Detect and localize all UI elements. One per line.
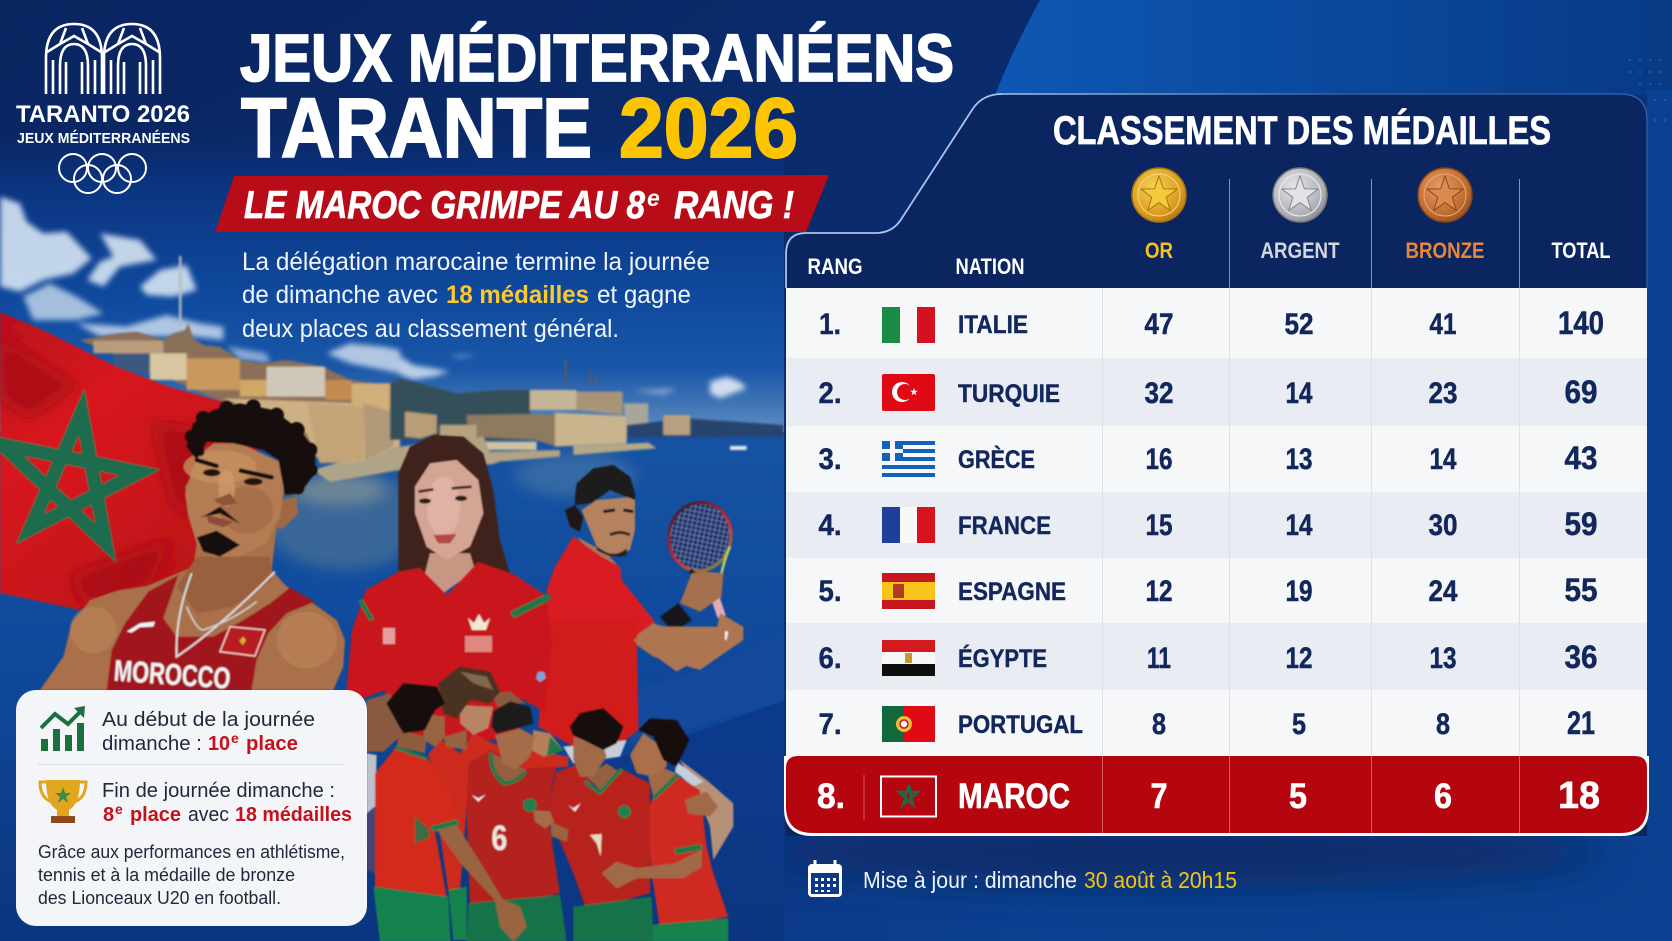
ear xyxy=(275,497,298,528)
row: Portugal: 21 xyxy=(1567,705,1595,741)
icon: olympic rings xyxy=(59,154,146,193)
title xyxy=(240,21,954,175)
row: Turquie: 69 xyxy=(1564,374,1598,410)
red banner xyxy=(215,175,829,232)
row: Égypte xyxy=(818,639,1598,676)
row: Turquie: 14 xyxy=(1286,377,1313,410)
row: Italie: 41 xyxy=(1430,308,1456,341)
lower blue swoosh xyxy=(630,630,786,745)
row: France: 59 xyxy=(1564,506,1598,542)
text: start of day: e xyxy=(231,730,239,746)
flag: Egypt xyxy=(882,640,935,676)
info card xyxy=(16,690,367,926)
column headers: NATION xyxy=(956,254,1024,279)
text: explanation xyxy=(38,842,345,908)
flag: Morocco xyxy=(881,776,936,816)
logo subtitle: JEUX MÉDITERRANÉENS xyxy=(17,130,190,147)
row: Grèce: GRÈCE xyxy=(958,445,1035,474)
icon: trophy xyxy=(40,780,86,823)
flag star xyxy=(2,412,140,543)
athlete: runner xyxy=(40,399,345,696)
red banner: LE MAROC GRIMPE AU 8 xyxy=(244,184,645,227)
icon: calendar xyxy=(808,860,842,897)
row: Turquie: 32 xyxy=(1144,377,1174,410)
row: Maroc highlighted: 6 xyxy=(1434,777,1452,816)
row: France: 15 xyxy=(1146,509,1172,542)
player 3: 6 xyxy=(491,819,507,858)
row: Égypte: 11 xyxy=(1147,642,1171,675)
flag: Spain xyxy=(882,573,935,609)
text: start of day: place xyxy=(246,733,298,755)
singlet xyxy=(107,575,315,690)
row: Égypte: 13 xyxy=(1430,642,1456,675)
small flag on chest xyxy=(220,627,265,656)
cap xyxy=(575,465,635,505)
logo wordmark: TARANTO 2026 xyxy=(16,101,190,128)
decorative dots xyxy=(1629,59,1666,121)
row: France: 30 xyxy=(1428,509,1458,542)
text: end of day: place xyxy=(130,804,181,826)
row: Maroc highlighted: 5 xyxy=(1289,777,1307,816)
row: France: 14 xyxy=(1286,509,1313,542)
jersey lettering: MOROCCO xyxy=(113,655,232,696)
row: Maroc highlighted xyxy=(784,756,1649,836)
row: Portugal: PORTUGAL xyxy=(958,711,1083,739)
row: Espagne xyxy=(818,572,1598,609)
forearm xyxy=(630,613,743,670)
player 5 arms xyxy=(602,850,702,888)
column headers: RANG xyxy=(808,254,862,279)
text: start of day xyxy=(102,709,315,755)
antenna xyxy=(179,256,182,346)
row: Turquie xyxy=(818,374,1598,411)
boat xyxy=(730,446,747,450)
row: Espagne: 19 xyxy=(1286,575,1312,608)
event logo xyxy=(16,24,190,193)
text: explanation: Grâce aux performances en athlétisme, xyxy=(38,842,345,862)
red banner: e xyxy=(647,185,660,211)
icon: rising chart xyxy=(41,706,85,751)
row: Grèce: 43 xyxy=(1564,440,1598,476)
update text: Mise à jour : dimanche xyxy=(863,867,1077,893)
text: end of day: e xyxy=(115,801,123,817)
row: Portugal: 7. xyxy=(818,708,842,741)
athlete: tennis player xyxy=(538,465,743,747)
polo trim xyxy=(512,596,550,615)
title: TARANTE xyxy=(241,81,592,175)
row: Espagne: ESPAGNE xyxy=(958,578,1066,606)
flag: Greece xyxy=(882,441,935,477)
row: Espagne: 5. xyxy=(818,575,842,608)
text: end of day: 8 xyxy=(103,804,114,826)
curly hair xyxy=(185,399,318,495)
city xyxy=(80,256,783,482)
row: Maroc highlighted: 18 xyxy=(1558,775,1600,817)
row: Portugal: 5 xyxy=(1292,708,1306,741)
neck xyxy=(423,553,475,593)
torso and arms xyxy=(40,527,345,690)
row: Italie: 52 xyxy=(1284,308,1314,341)
polo shirt xyxy=(345,562,552,740)
football team xyxy=(367,667,733,941)
row: Italie: ITALIE xyxy=(958,311,1028,339)
sea xyxy=(0,432,784,877)
intro paragraph: 18 médailles xyxy=(446,281,589,309)
row: France: FRANCE xyxy=(958,512,1051,540)
forearms xyxy=(367,692,525,752)
athlete: woman in red polo xyxy=(345,435,552,752)
face xyxy=(582,497,635,557)
intro paragraph: La délégation marocaine termine la journée xyxy=(242,248,710,276)
hair xyxy=(398,435,512,623)
icon: twin arches xyxy=(46,24,160,94)
update note xyxy=(808,860,1237,897)
row: Italie: 47 xyxy=(1144,308,1174,341)
row: Égypte: 36 xyxy=(1564,639,1598,675)
player 5 body behind arm xyxy=(630,718,728,941)
water reflections xyxy=(265,453,635,570)
panel: medal table xyxy=(784,94,1649,836)
Moroccan flag xyxy=(0,312,270,610)
row: Maroc highlighted: 8. xyxy=(817,777,845,816)
player 4 xyxy=(547,708,653,941)
text: end of day: 18 médailles xyxy=(235,804,352,826)
racket xyxy=(663,497,737,577)
table heading: CLASSEMENT DES MÉDAILLES xyxy=(1053,108,1551,153)
row: Grèce: 13 xyxy=(1286,443,1312,476)
row: Égypte: 6. xyxy=(818,642,842,675)
icon: gold medal xyxy=(1132,168,1186,222)
player 2 xyxy=(428,667,568,940)
row: Portugal xyxy=(818,705,1595,742)
icon: bronze medal xyxy=(1418,168,1472,222)
face xyxy=(185,443,283,557)
text: start of day: Au début de la journée xyxy=(102,709,315,731)
column headers: ARGENT xyxy=(1260,238,1340,263)
flag: Portugal xyxy=(882,706,935,742)
title: 2026 xyxy=(619,81,798,175)
title: JEUX MÉDITERRANÉENS xyxy=(240,21,954,96)
row: Égypte: ÉGYPTE xyxy=(958,644,1047,673)
column headers: OR xyxy=(1145,238,1173,263)
row: Turquie: 2. xyxy=(818,377,842,410)
text: start of day: 10 xyxy=(208,733,230,755)
intro paragraph: et gagne xyxy=(597,281,691,309)
flag: France xyxy=(882,507,935,543)
text: explanation: tennis et à la médaille de bronze xyxy=(38,865,295,885)
clouds xyxy=(0,197,747,398)
face xyxy=(415,460,483,560)
column headers: TOTAL xyxy=(1552,238,1610,263)
red banner: RANG ! xyxy=(674,184,794,227)
logo xyxy=(127,622,155,633)
sky xyxy=(0,130,784,437)
panel header background xyxy=(786,94,1647,836)
flag: Italy xyxy=(882,307,935,343)
text: end of day: avec xyxy=(188,804,229,826)
shirt xyxy=(547,537,655,707)
flag: Turkey xyxy=(882,374,935,411)
polo crest xyxy=(465,614,492,652)
row: France: 4. xyxy=(818,509,842,542)
sleeves behind xyxy=(680,760,733,860)
background photo: Taranto seafront xyxy=(0,130,786,941)
row: Turquie: TURQUIE xyxy=(958,380,1060,408)
column headers xyxy=(808,238,1610,279)
row: Italie: 1. xyxy=(819,308,841,341)
player 1 xyxy=(373,683,527,941)
column headers: BRONZE xyxy=(1406,238,1484,263)
row: Turquie: 23 xyxy=(1428,377,1458,410)
row: Espagne: 24 xyxy=(1428,575,1458,608)
row: Égypte: 12 xyxy=(1286,642,1312,675)
row: Maroc highlighted: 7 xyxy=(1150,777,1168,816)
row: Grèce: 16 xyxy=(1146,443,1172,476)
goatee xyxy=(197,531,240,557)
row: Maroc highlighted: MAROC xyxy=(958,777,1070,816)
icon: silver medal xyxy=(1273,168,1327,222)
row: Espagne: 55 xyxy=(1564,572,1598,608)
necklaces xyxy=(176,572,275,657)
row: Grèce: 14 xyxy=(1430,443,1457,476)
row: Portugal: 8 xyxy=(1436,708,1450,741)
text: end of day: Fin de journée dimanche : xyxy=(102,780,335,802)
text: explanation: des Lionceaux U20 en football. xyxy=(38,888,281,908)
row: Espagne: 12 xyxy=(1146,575,1172,608)
player 3 xyxy=(467,702,568,941)
row: France xyxy=(818,506,1598,543)
shirt top and neck xyxy=(577,537,622,570)
text: start of day: dimanche : xyxy=(102,733,202,755)
flag folds xyxy=(0,340,215,605)
update note: 30 août à 20h15 xyxy=(1084,867,1237,893)
intro paragraph: deux places au classement général. xyxy=(242,315,619,343)
table rows background xyxy=(786,288,1647,760)
intro paragraph xyxy=(242,248,710,343)
row: Portugal: 8 xyxy=(1152,708,1166,741)
row: Italie xyxy=(819,305,1604,343)
intro paragraph: de dimanche avec xyxy=(242,281,438,309)
text: end of day xyxy=(102,780,352,826)
row: Grèce: 3. xyxy=(818,443,842,476)
row: Italie: 140 xyxy=(1558,305,1604,341)
row: Grèce xyxy=(818,440,1598,477)
upper hand xyxy=(680,572,723,612)
